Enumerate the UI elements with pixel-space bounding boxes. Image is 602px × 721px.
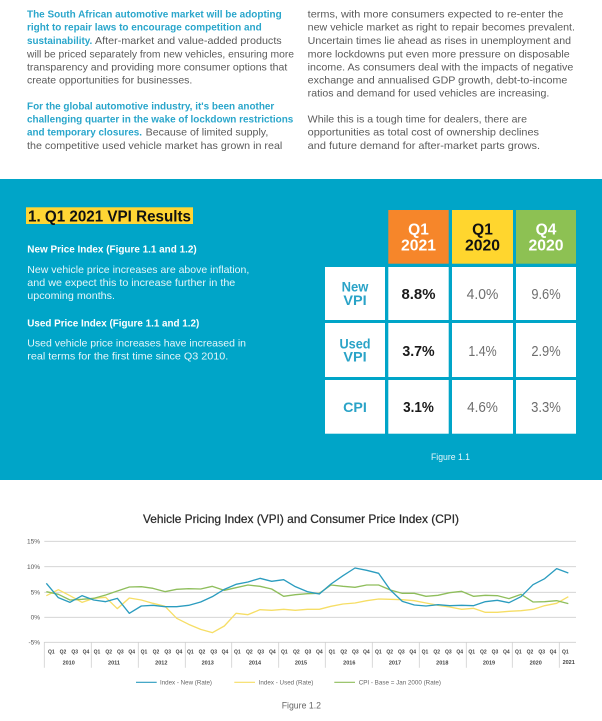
x axis quarter labels: Q1	[141, 650, 148, 656]
intro text: left column: transparency and providing more consumer options that	[27, 62, 287, 74]
x axis year labels: 2016	[343, 660, 355, 666]
intro text: right column: terms, with more consumers expected to re-enter the	[308, 9, 563, 21]
row: CPI: 3.3%	[531, 400, 561, 416]
intro text: right column: Uncertain times lie ahead as rises in unemployment and	[308, 35, 571, 47]
y axis labels: -5%	[28, 640, 40, 646]
x axis quarter labels: Q1	[48, 650, 55, 656]
x axis year labels: 2010	[63, 660, 75, 666]
x axis quarter labels: Q4	[128, 650, 135, 656]
row: New VPI: 8.8%	[402, 287, 436, 303]
x axis quarter labels: Q2	[199, 650, 206, 656]
header cell: Q1 2021	[388, 210, 449, 264]
legend item: Index - Used	[234, 680, 313, 686]
row: New VPI	[325, 267, 576, 320]
x axis quarter labels: Q3	[210, 650, 217, 656]
header cell: Q4 2020: Q4	[536, 221, 557, 238]
x axis quarter labels: Q2	[60, 650, 67, 656]
header cell: Q4 2020: 2020	[528, 238, 564, 255]
row: Used VPI: 1.4%	[468, 344, 497, 360]
intro text: left column: will be priced separately from new vehicles, ensuring more	[26, 48, 294, 60]
intro text: left column: the competitive used vehicle market has grown in real	[27, 140, 282, 152]
header cell: Q1 2021: Q1	[408, 221, 429, 238]
x axis year labels: 2012	[155, 660, 167, 666]
intro text: right column: new vehicle market as right to repair becomes prevalent.	[308, 22, 575, 34]
header cell: Q1 2020: 2020	[465, 238, 500, 255]
text block: Used Price Index	[27, 318, 246, 363]
legend item: Index - New: Index - New (Rate)	[160, 680, 212, 686]
x axis quarter labels: Q3	[352, 650, 359, 656]
x axis quarter labels: Q4	[83, 650, 90, 656]
x axis quarter labels: Q1	[234, 650, 241, 656]
row: CPI: 4.6%	[467, 400, 498, 416]
x axis quarter labels: Q4	[456, 650, 463, 656]
x axis year labels: 2011	[108, 660, 120, 666]
x axis quarter labels: Q4	[222, 650, 229, 656]
legend	[136, 680, 441, 686]
x axis quarter labels: Q2	[246, 650, 253, 656]
x axis quarter labels: Q2	[153, 650, 160, 656]
x axis quarter labels: Q2	[105, 650, 112, 656]
intro text: right column: and future demand for after-market parts grows.	[308, 140, 540, 152]
text block: New Price Index	[27, 244, 249, 302]
x axis quarter labels: Q1	[187, 650, 194, 656]
row: New VPI: New	[342, 279, 368, 295]
intro text: right column: opportunities as total cost of ownership declines	[308, 127, 539, 139]
text block: Used Price Index: Used Price Index (Figure 1.1 and 1.2)	[27, 318, 199, 330]
x axis quarter labels: Q2	[386, 650, 393, 656]
x axis quarter labels	[48, 650, 569, 656]
series: Index - Used	[46, 590, 568, 633]
y axis labels: 5%	[31, 590, 40, 596]
intro text: right column: While this is a tough time for dealers, there are	[308, 114, 527, 126]
text block: Used Price Index: Used vehicle price increases have increased in	[27, 338, 246, 350]
x axis quarter labels: Q2	[340, 650, 347, 656]
panel: Q1 2021 VPI results band	[0, 179, 602, 480]
legend item: Index - New	[136, 680, 212, 686]
x axis quarter labels: Q4	[550, 650, 557, 656]
intro text: left column: For the global automotive industry, it's been another	[27, 101, 274, 113]
row: New VPI: 9.6%	[531, 287, 561, 303]
series: CPI	[46, 585, 568, 604]
header cell: Q1 2020	[452, 210, 513, 264]
x axis quarter labels: Q3	[538, 650, 545, 656]
x axis year labels: 2014	[249, 660, 262, 666]
intro text: left column: Because of limited supply,	[146, 127, 268, 139]
caption: Figure 1.1: Figure 1.1	[431, 452, 470, 462]
intro text: right column: more lockdowns put even more pressure on disposable	[308, 48, 570, 60]
y axis labels	[27, 538, 40, 646]
series: Index - New	[46, 568, 568, 613]
row: New VPI: 4.0%	[467, 287, 498, 303]
intro text: right column: income. As consumers deal with the impacts of negative	[308, 62, 573, 74]
row: Used VPI: Used	[340, 335, 370, 351]
intro text: right column: exchange and annualised GDP growth, debt-to-income	[308, 75, 567, 87]
header cell: Q1 2021: 2021	[401, 238, 436, 255]
row: Used VPI: VPI	[343, 349, 367, 365]
x axis quarter labels: Q1	[515, 650, 522, 656]
header cell: Q1 2020: Q1	[472, 221, 493, 238]
x axis quarter labels: Q1	[329, 650, 336, 656]
x axis quarter labels: Q3	[398, 650, 405, 656]
text block: Used Price Index: real terms for the first time since Q3 2010.	[27, 351, 228, 363]
legend item: CPI: CPI - Base = Jan 2000 (Rate)	[359, 680, 441, 686]
intro text: left column: After-market and value-added products	[95, 35, 282, 47]
x axis quarter labels: Q1	[562, 650, 569, 656]
intro text: right column	[308, 9, 575, 152]
intro text: left column	[26, 9, 294, 152]
x axis quarter labels: Q3	[445, 650, 452, 656]
intro text: left column: The South African automotive market will be adopting	[27, 9, 282, 21]
x axis year labels: 2015	[295, 660, 307, 666]
x axis quarter labels: Q1	[375, 650, 382, 656]
text block: New Price Index: New Price Index (Figure 1.1 and 1.2)	[27, 244, 197, 256]
x axis quarter labels: Q1	[422, 650, 429, 656]
x axis quarter labels: Q4	[503, 650, 510, 656]
row: CPI: CPI	[343, 399, 367, 415]
intro text: right column: ratios and demand for used vehicles are increasing.	[308, 88, 549, 100]
y axis labels: 10%	[27, 564, 40, 571]
x axis quarter labels: Q4	[176, 650, 183, 656]
row: New VPI: VPI	[343, 292, 367, 308]
caption: Figure 1.2: Figure 1.2	[282, 700, 321, 710]
x axis quarter labels: Q2	[527, 650, 534, 656]
x axis quarter labels: Q4	[316, 650, 323, 656]
intro text: left column: challenging quarter in the wake of lockdown restrictions	[27, 114, 293, 126]
chart title: Vehicle Pricing Index (VPI) and Consumer Price Index (CPI)	[143, 512, 459, 526]
x axis quarter labels: Q1	[281, 650, 288, 656]
x axis year labels	[63, 660, 575, 666]
intro text: left column: and temporary closures.	[27, 127, 142, 139]
text block: New Price Index: New vehicle price increases are above inflation,	[27, 264, 249, 276]
row: CPI	[325, 380, 576, 434]
x axis quarter labels: Q3	[305, 650, 312, 656]
x axis year labels: 2018	[436, 660, 448, 666]
x axis quarter labels: Q3	[257, 650, 264, 656]
x axis quarter labels: Q3	[71, 650, 78, 656]
text block: New Price Index: upcoming months.	[27, 290, 115, 302]
x axis quarter labels: Q4	[409, 650, 416, 656]
x axis year labels: 2021	[563, 660, 575, 666]
row: Used VPI	[325, 323, 576, 377]
x axis year labels: 2020	[530, 660, 542, 666]
row: Used VPI: 3.7%	[402, 344, 435, 360]
legend item: Index - Used: Index - Used (Rate)	[259, 680, 313, 686]
row: CPI: 3.1%	[403, 400, 434, 416]
x axis quarter labels: Q2	[433, 650, 440, 656]
x axis quarter labels: Q1	[94, 650, 101, 656]
x axis year labels: 2019	[483, 660, 495, 666]
intro text: left column: right to repair laws to encourage competition and	[27, 22, 262, 34]
x axis quarter labels: Q3	[164, 650, 171, 656]
intro text: left column: sustainability.	[27, 35, 92, 47]
x axis quarter labels: Q1	[468, 650, 475, 656]
heading: 1. Q1 2021 VPI Results: 1. Q1 2021 VPI Results	[28, 209, 191, 226]
x axis quarter labels: Q2	[293, 650, 300, 656]
x axis quarter labels: Q3	[117, 650, 124, 656]
x axis year labels: 2013	[202, 660, 214, 666]
x axis year labels: 2017	[389, 660, 401, 666]
y axis labels: 0%	[31, 614, 40, 622]
x axis quarter labels: Q4	[363, 650, 370, 656]
text block: New Price Index: and we expect this to increase further in the	[27, 277, 235, 289]
line chart: VPI and CPI 2010 to 2021	[27, 538, 576, 668]
header cell: Q4 2020	[516, 210, 576, 264]
y axis labels: 15%	[27, 538, 40, 546]
x axis quarter labels: Q2	[480, 650, 487, 656]
x axis quarter labels: Q3	[492, 650, 499, 656]
table: VPI and CPI comparison	[325, 210, 576, 434]
intro text: left column: create opportunities for businesses.	[27, 75, 192, 87]
row: Used VPI: 2.9%	[531, 344, 561, 360]
x axis quarter labels: Q4	[269, 650, 276, 656]
